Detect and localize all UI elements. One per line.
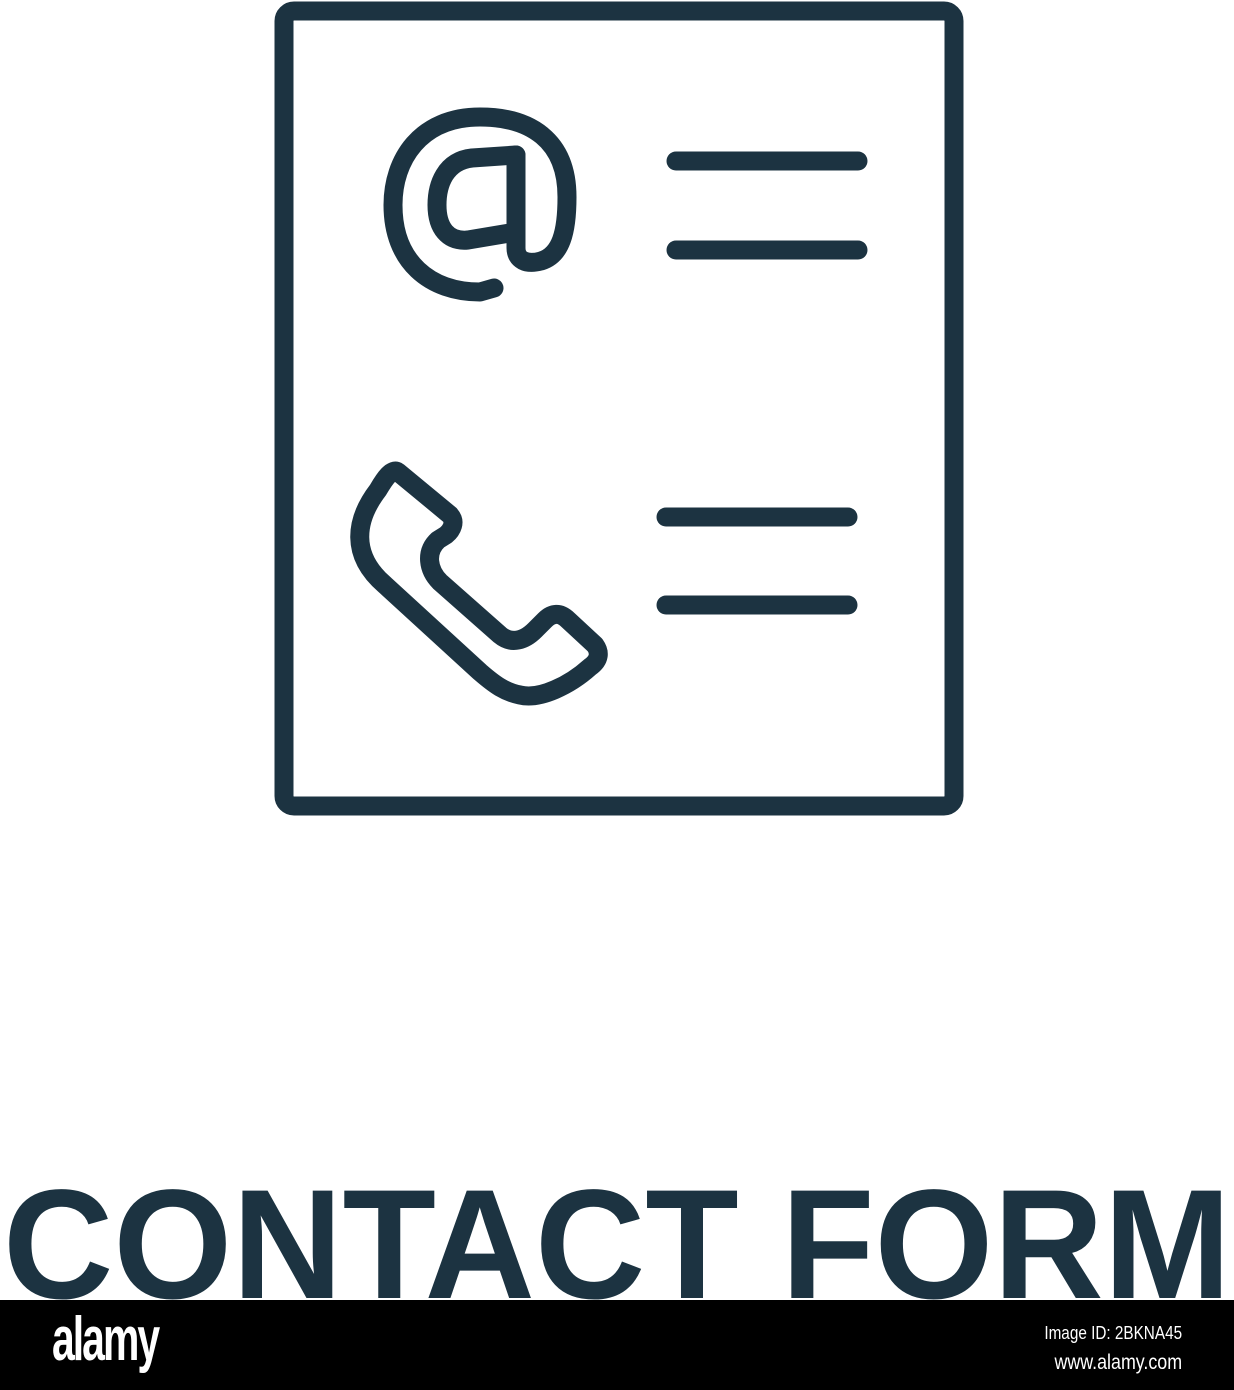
email lines [676, 161, 858, 250]
icon: at symbol [393, 117, 567, 292]
footer bar [0, 1300, 1234, 1390]
image id: www.alamy.com [1054, 1351, 1182, 1374]
phone lines [666, 517, 848, 605]
image id [1044, 1323, 1182, 1374]
icon: phone handset [360, 471, 598, 696]
form frame [284, 11, 954, 806]
logo: alamy: alamy [52, 1305, 158, 1374]
image id: Image ID: 2BKNA45 [1044, 1323, 1182, 1343]
